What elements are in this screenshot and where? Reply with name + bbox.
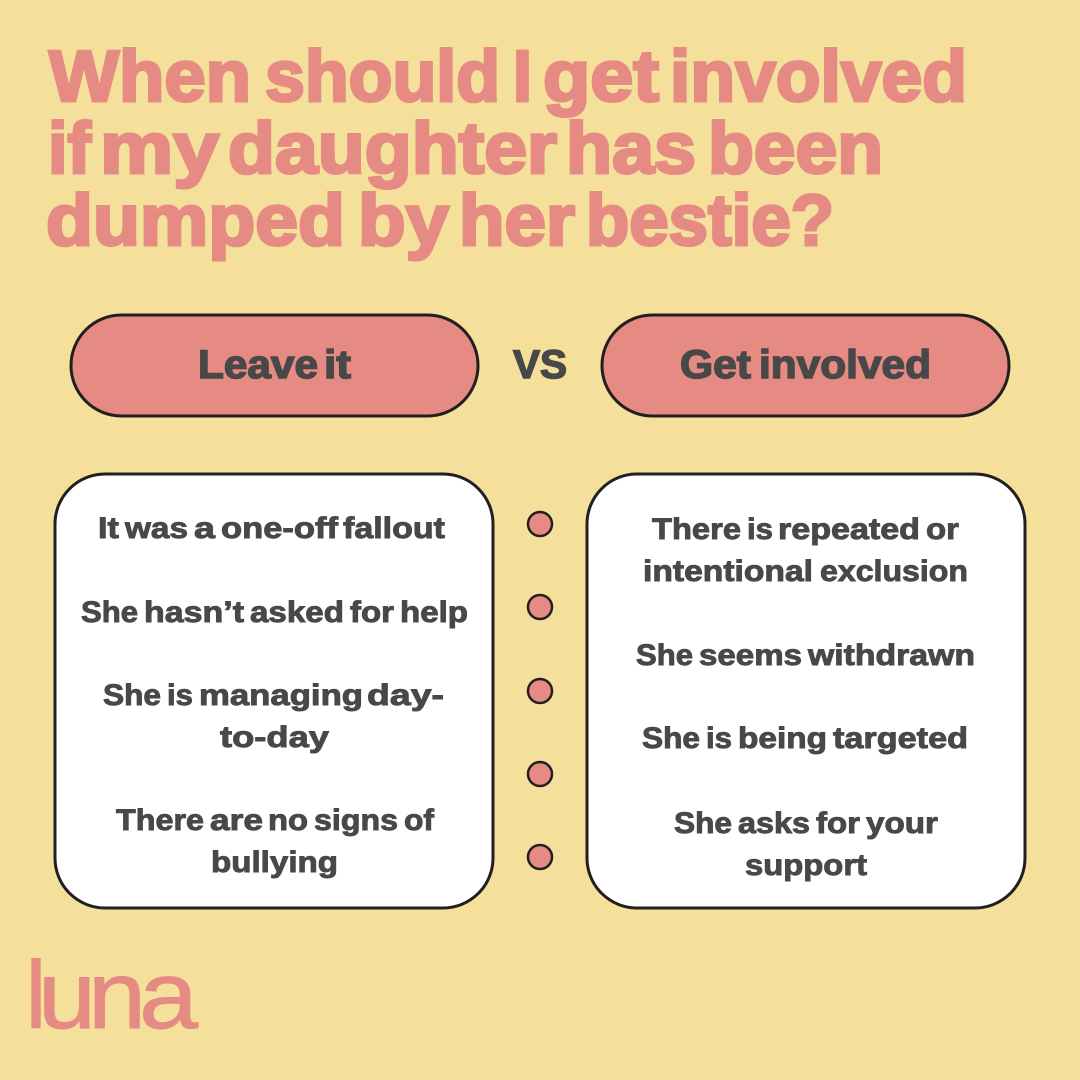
panel: leave it list: was [124, 512, 188, 545]
title: involved [670, 37, 967, 117]
panel: leave it list: is [167, 679, 193, 712]
panel: leave it list: She [81, 596, 138, 629]
panel: get involved list: is [747, 513, 773, 546]
title: get [543, 37, 659, 117]
panel: leave it list: hasn’t [144, 596, 244, 629]
panel: leave it list: fallout [343, 512, 445, 545]
panel: get involved list: your [866, 807, 939, 840]
panel: get involved list: intentional [643, 555, 813, 588]
title: I [513, 37, 532, 117]
logo: luna: a [139, 942, 199, 1049]
panel: leave it list: There [116, 804, 204, 837]
logo: luna: u [38, 942, 96, 1049]
panel: get involved list: targeted [833, 722, 968, 755]
panel: leave it list: managing [199, 679, 363, 712]
panel: get involved list: exclusion [820, 555, 968, 588]
panel: leave it list: a [194, 512, 216, 545]
panel: leave it list: for [350, 596, 395, 629]
pill: Leave it [71, 315, 478, 416]
panel: leave it list: day- [367, 679, 444, 712]
panel: leave it list: help [400, 596, 468, 629]
title: my [100, 109, 219, 189]
panel: leave it list: to-day [220, 721, 330, 754]
logo: luna: n [88, 942, 146, 1049]
title: daughter [228, 109, 557, 189]
panel: leave it list: It [98, 512, 119, 545]
title: should [265, 37, 500, 117]
title: if [48, 109, 92, 189]
panel: get involved list: There [652, 513, 741, 546]
title: by [358, 181, 449, 261]
panel: get involved list: for [816, 807, 861, 840]
panel: leave it list: She [103, 679, 161, 712]
panel: get involved list: She [636, 639, 693, 672]
pill: Leave it: it [324, 343, 351, 387]
panel: get involved list: She [674, 807, 732, 840]
panel: leave it list: one-off [221, 512, 338, 545]
panel: get involved list: She [642, 722, 700, 755]
panel: get involved list: repeated [778, 513, 920, 546]
pill: Leave it: Leave [198, 343, 318, 387]
panel: leave it list: bullying [211, 846, 338, 879]
panel: get involved list: asks [738, 807, 810, 840]
panel: get involved list: is [706, 722, 732, 755]
pill: Get involved: Get [680, 343, 751, 387]
title: When [49, 37, 251, 117]
logo: luna [26, 942, 199, 1049]
panel: leave it list: signs [314, 804, 398, 837]
panel: leave it list: asked [250, 596, 344, 629]
panel: get involved list [587, 474, 1025, 908]
pill: Get involved [602, 315, 1009, 416]
title: has [566, 109, 696, 189]
title: been [708, 109, 883, 189]
panel: leave it list: no [268, 804, 308, 837]
panel: get involved list: being [738, 722, 827, 755]
panel: get involved list: withdrawn [807, 639, 975, 672]
title: dumped [46, 181, 345, 261]
title: bestie? [586, 181, 834, 261]
panel: leave it list: are [210, 804, 263, 837]
connector dots [528, 512, 552, 869]
pill: Get involved: involved [759, 343, 931, 387]
panel: get involved list: seems [699, 639, 802, 672]
panel: get involved list: or [926, 513, 960, 546]
title [46, 37, 967, 261]
title: her [459, 181, 575, 261]
panel: get involved list: support [745, 849, 867, 882]
vs label: VS [513, 343, 567, 387]
panel: leave it list [55, 474, 493, 908]
logo: luna: l [26, 942, 46, 1049]
panel: leave it list: of [404, 804, 434, 837]
